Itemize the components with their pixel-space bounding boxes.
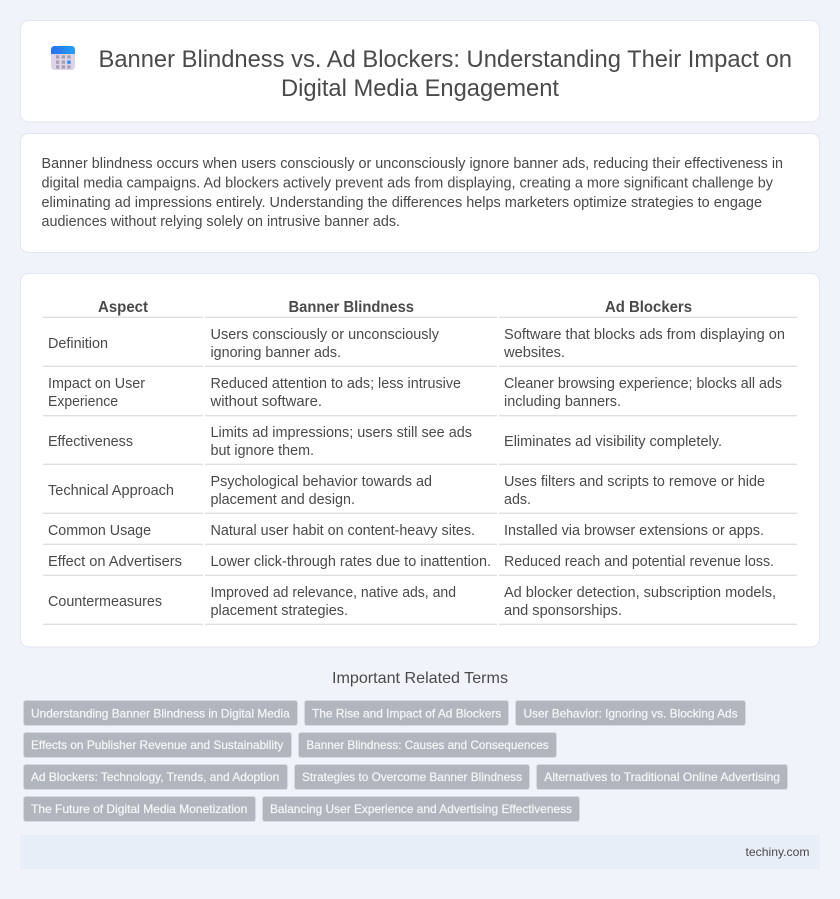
row: countermeasures: Ad blocker detection, subscription models, — [504, 585, 776, 601]
chip — [304, 700, 508, 726]
row: definition: websites. — [503, 345, 565, 361]
row: impact on user experience: Impact on User — [48, 376, 145, 392]
row: common usage: Common Usage — [48, 523, 151, 539]
row: technical approach: Technical Approach — [48, 483, 174, 499]
row: impact on user experience — [48, 376, 782, 410]
row: definition: Software that blocks ads from displaying on — [504, 327, 785, 343]
title: Banner Blindness vs. Ad Blockers: Understanding Their Impact on — [98, 46, 792, 73]
text block: introduction paragraph — [42, 156, 783, 230]
chip: User Behavior: Ignoring vs. Blocking Ads — [524, 706, 738, 720]
chip — [262, 796, 580, 822]
row: countermeasures: placement strategies. — [210, 603, 348, 619]
row: effect on advertisers: Lower click-through rates due to inattention. — [210, 554, 491, 570]
chip — [24, 732, 292, 758]
row: effect on advertisers — [48, 554, 774, 570]
row: definition: Definition — [48, 336, 108, 352]
table header — [98, 299, 692, 316]
row: impact on user experience: Reduced attention to ads; less intrusive — [210, 376, 461, 392]
row: impact on user experience: including banners. — [504, 394, 621, 410]
row: impact on user experience: Cleaner browsing experience; blocks all ads — [504, 376, 782, 392]
text block: introduction paragraph: digital media campaigns. Ad blockers actively prevent ads from displaying, creating a more significant challenge by — [42, 176, 774, 192]
table header: Banner Blindness — [288, 299, 414, 316]
row: countermeasures: Improved ad relevance, native ads, and — [210, 585, 456, 601]
row: technical approach — [48, 474, 765, 508]
row: technical approach: Psychological behavior towards ad — [210, 474, 432, 490]
row: technical approach: Uses filters and scripts to remove or hide — [504, 474, 765, 490]
text block: introduction paragraph: audiences without relying solely on intrusive banner ads. — [42, 214, 400, 230]
text block: introduction paragraph: eliminating ad impressions entirely. Understanding the differences helps marketers optimize strategies to engage — [42, 195, 762, 211]
chip — [536, 764, 788, 790]
row: common usage: Installed via browser extensions or apps. — [504, 523, 764, 539]
row: effect on advertisers: Effect on Advertisers — [48, 554, 182, 570]
chip: Ad Blockers: Technology, Trends, and Adoption — [31, 770, 279, 784]
chip — [24, 796, 256, 822]
row: countermeasures: Countermeasures — [48, 594, 162, 610]
panel: related term chips — [24, 700, 788, 822]
row: common usage: Natural user habit on content-heavy sites. — [210, 523, 475, 539]
row: common usage — [48, 523, 764, 539]
row: definition: ignoring banner ads. — [210, 345, 341, 361]
chip: Banner Blindness: Causes and Consequences — [306, 738, 549, 752]
icon: calendar — [51, 46, 75, 70]
chip — [298, 732, 556, 758]
chip: Strategies to Overcome Banner Blindness — [302, 770, 522, 784]
chip — [24, 700, 298, 726]
row: effectiveness — [48, 425, 722, 459]
chip — [24, 764, 288, 790]
row: effectiveness: Effectiveness — [48, 434, 133, 450]
row: effectiveness: Limits ad impressions; users still see ads — [210, 425, 472, 441]
row: countermeasures — [48, 585, 776, 619]
footer: techiny.com — [746, 845, 810, 859]
row: effect on advertisers: Reduced reach and potential revenue loss. — [504, 554, 774, 570]
row: technical approach: ads. — [504, 492, 531, 508]
chip — [516, 700, 746, 726]
text block: introduction paragraph: Banner blindness occurs when users consciously or unconsciously ignore banner ads, reducing their effectiveness in — [42, 156, 783, 172]
row: definition — [48, 327, 785, 361]
panel: introduction — [20, 134, 820, 252]
row: definition: Users consciously or unconsciously — [210, 327, 440, 343]
chip: Balancing User Experience and Advertising Effectiveness — [270, 802, 572, 816]
footer — [20, 835, 820, 869]
chip: The Rise and Impact of Ad Blockers — [312, 706, 501, 720]
chip: The Future of Digital Media Monetization — [31, 802, 247, 816]
row: effectiveness: Eliminates ad visibility completely. — [504, 434, 722, 450]
title: Digital Media Engagement — [281, 75, 559, 102]
chip: Understanding Banner Blindness in Digital Media — [31, 706, 290, 720]
row: technical approach: placement and design. — [210, 492, 355, 508]
row: effectiveness: but ignore them. — [210, 443, 314, 459]
chip: Alternatives to Traditional Online Advertising — [544, 770, 780, 784]
row: countermeasures: and sponsorships. — [504, 603, 622, 619]
title — [98, 46, 792, 102]
table header: Aspect — [98, 299, 149, 316]
heading: important related terms: Important Related Terms — [332, 670, 508, 687]
chip — [294, 764, 530, 790]
table header: Ad Blockers — [605, 299, 692, 316]
row: impact on user experience: Experience — [48, 394, 118, 410]
chip: Effects on Publisher Revenue and Sustainability — [31, 738, 283, 752]
panel: header — [20, 20, 820, 122]
row: impact on user experience: without software. — [209, 394, 322, 410]
panel: comparison table — [20, 274, 820, 647]
